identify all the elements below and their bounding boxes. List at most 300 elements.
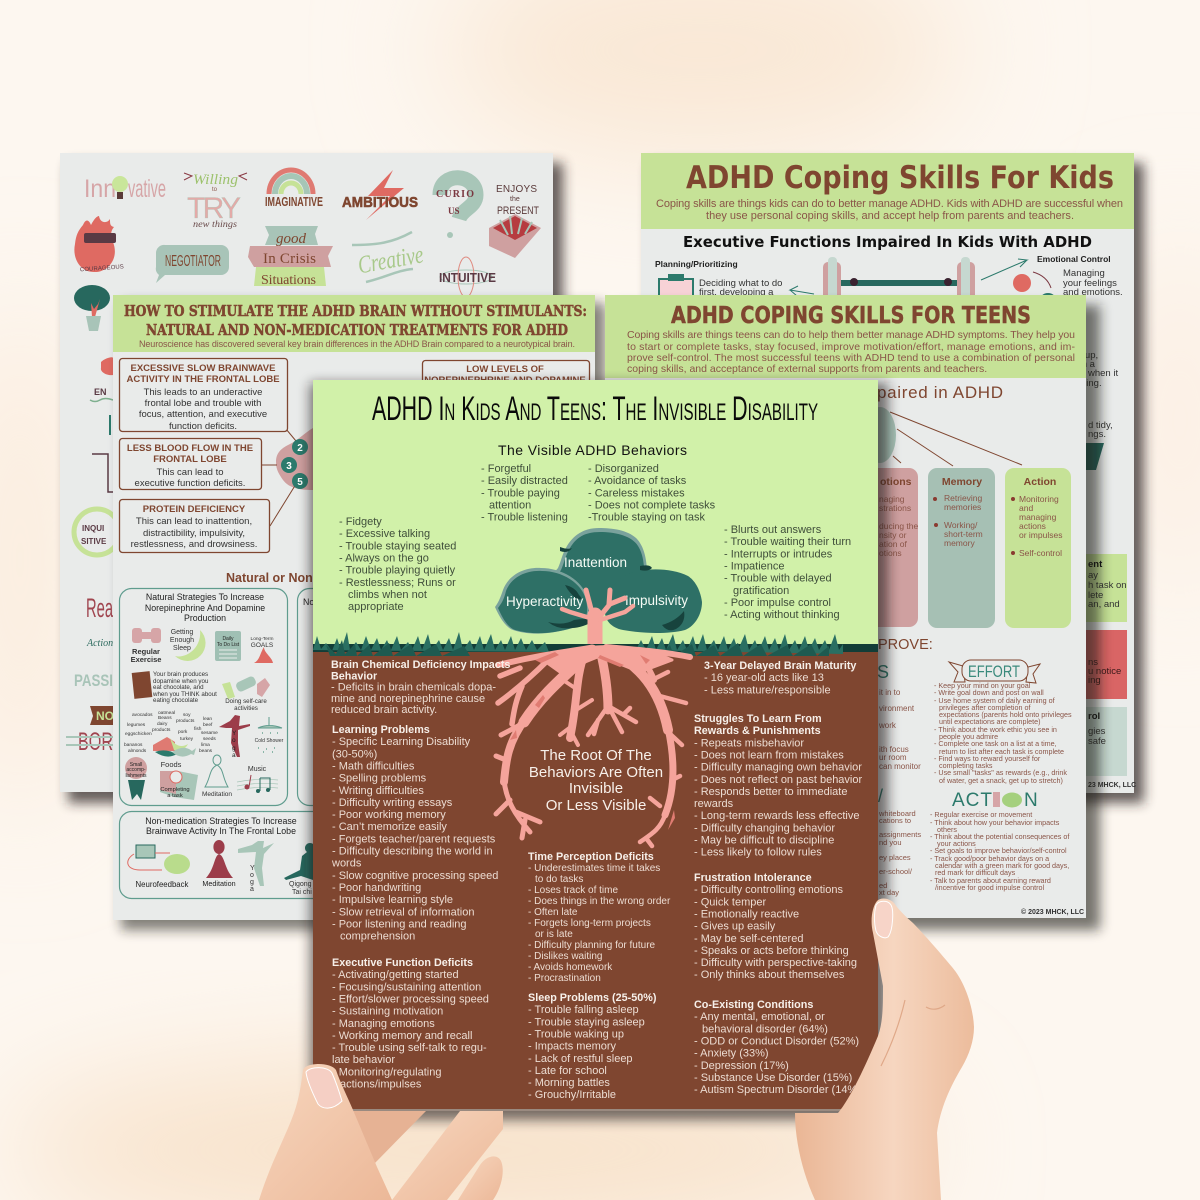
tree labels: Impulsivity xyxy=(625,593,688,608)
icon: qigong figure: Qigong xyxy=(289,881,312,888)
card: action xyxy=(1005,468,1071,628)
heading: impaired in ADHD: paired in ADHD xyxy=(877,383,1003,402)
block: time perception deficits: - Procrastination xyxy=(528,973,601,984)
hand: left holding poster xyxy=(259,1064,503,1200)
foods list: Beans xyxy=(158,715,172,721)
box: excessive slow brainwave: focus, attention, and executive xyxy=(139,409,267,420)
list: inattention right: - Does not complete tasks xyxy=(588,499,716,511)
list: action tips: - Think about the potential consequences of xyxy=(930,832,1069,841)
block: learning problems: - Can’t memorize easily xyxy=(332,821,447,833)
header band xyxy=(605,295,1086,378)
card: emotions: strations xyxy=(879,503,911,513)
block: time perception deficits: - Often late xyxy=(528,907,578,918)
block: learning problems: - Poor handwriting xyxy=(332,882,421,894)
box: pale teal xyxy=(1060,707,1127,776)
box: less blood flow: FRONTAL LOBE xyxy=(153,454,227,465)
sticker: willing to try: TRY xyxy=(187,192,241,225)
card: memory: Memory xyxy=(942,476,982,488)
sticker: willing to try: new things xyxy=(193,219,238,229)
icon: yoga: Y xyxy=(232,730,237,737)
block: learning problems: - Poor listening and reading xyxy=(332,918,467,930)
card: emotions: ducing the xyxy=(879,521,918,531)
sticker: ambitious lightning xyxy=(342,170,418,220)
card: action: managing xyxy=(1019,512,1057,522)
tree roots xyxy=(496,647,690,846)
box: less blood flow xyxy=(120,438,262,490)
list: effort tips: - Keep your mind on your goal xyxy=(934,681,1031,690)
list fragment: planning and organization: vironment xyxy=(879,704,915,713)
icon: meditation figure: Meditation xyxy=(202,879,236,888)
sticker: enjoys the present: PRESENT xyxy=(497,205,539,217)
list: inattention left: attention xyxy=(489,499,531,511)
sticker: entertaining fragment xyxy=(90,357,113,435)
hand: right holding poster xyxy=(795,899,974,1200)
list: effort tips: of water, get a snack, get up to stretch) xyxy=(939,776,1063,785)
list: inattention right: - Careless mistakes xyxy=(588,487,685,499)
sticker: innovative: Inn xyxy=(84,175,116,203)
list: impulsivity: - Impatience xyxy=(724,560,785,572)
block: executive function deficits: - Monitoring/regulating xyxy=(332,1066,441,1078)
header band: they use personal coping skills, and accept help from parents and teachers. xyxy=(706,210,1074,222)
block: time perception deficits: - Difficulty planning for future xyxy=(528,940,656,951)
icon: cold shower xyxy=(255,717,284,752)
icon: goals: GOALS xyxy=(251,642,274,649)
card: memory: Retrieving xyxy=(944,493,983,503)
list fragment: planning and organization: ur room xyxy=(879,753,907,762)
list: effort tips: until expectations are complete) xyxy=(939,717,1040,726)
block: learning problems: - Poor working memory xyxy=(332,809,446,821)
tree labels xyxy=(506,555,688,609)
banner: effort xyxy=(949,660,1040,683)
block: learning problems: (30-50%) xyxy=(332,748,377,760)
icon: neurofeedback xyxy=(128,845,190,889)
panel: back-left strengths poster xyxy=(60,153,563,803)
block: rewards and punishments: Struggles To Learn From xyxy=(694,713,822,725)
sticker: enjoys the present: ENJOYS xyxy=(496,184,537,195)
block: time perception deficits: or is late xyxy=(535,929,573,940)
numbered markers: 5 xyxy=(297,477,303,488)
foods list: legumes xyxy=(127,722,146,728)
list fragment: planning and organization: can monitor xyxy=(879,762,921,771)
box: green: h task on xyxy=(1088,580,1127,591)
block: time perception deficits: Time Perception Deficits xyxy=(528,851,654,863)
sticker: reading, action, passion, no boredom: Rea xyxy=(86,593,114,623)
block: rewards and punishments: Rewards & Punishments xyxy=(694,725,821,737)
sticker: negotiator speech bubble: NEGOTIATOR xyxy=(165,253,221,270)
sticker: imaginative rainbow: IMAGINATIVE xyxy=(265,194,323,209)
icon: small accomplishments ribbon: lishments xyxy=(125,773,147,779)
list: effort tips xyxy=(934,681,1072,785)
list fragment: planning and organization: nd you xyxy=(879,838,902,847)
block: co-existing conditions: - Autism Spectrum Disorder (14%) xyxy=(694,1084,861,1096)
block: brain chemical deficiency: reduced brain activity. xyxy=(331,704,437,716)
box: green: an, and xyxy=(1088,599,1120,610)
list fragment: planning and organization: S xyxy=(877,662,889,682)
block: rewards and punishments: - Repeats misbehavior xyxy=(694,737,804,749)
panel: natural strategies: Norepinephrine And Dopamine xyxy=(145,603,265,613)
block: rewards and punishments: - Less likely to follow rules xyxy=(694,847,822,859)
block: frustration intolerance: - Only thinks about themselves xyxy=(694,969,845,981)
sticker: reading, action, passion, no boredom: NO xyxy=(96,709,114,723)
box: protein deficiency: distractibility, impulsivity, xyxy=(143,528,245,539)
icon: dumbbell xyxy=(131,628,161,664)
block: time perception deficits: - Dislikes waiting xyxy=(528,951,602,962)
box: coral xyxy=(1060,630,1127,699)
list fragment: planning and organization: ey places xyxy=(879,853,911,862)
block: rewards and punishments: - May be difficult to discipline xyxy=(694,834,834,846)
icon: small accomplishments ribbon xyxy=(125,757,147,800)
item: emotional control: your feelings xyxy=(1063,278,1117,289)
sticker: curious question mark xyxy=(436,178,476,238)
icon: neurofeedback: Neurofeedback xyxy=(136,880,189,889)
numbered markers xyxy=(281,439,308,489)
copyright: © 2023 MHCK, LLC xyxy=(1021,908,1084,916)
icon: yoga: o xyxy=(232,737,236,744)
block: executive function deficits: - Working memory and recall xyxy=(332,1030,472,1042)
visible text fragments right edge xyxy=(1077,332,1118,470)
panel: non-medication strategies: Non-medication Strategies To Increase xyxy=(145,816,297,826)
sticker: innovative xyxy=(84,175,166,203)
list: effort tips: - Use home system of daily earning of xyxy=(934,696,1055,705)
list: effort tips: - Use small "tasks" as rewards (e.g., drink xyxy=(934,768,1067,777)
header band: prove self-control. The most successful teens with ADHD tend to use a combination of personal xyxy=(627,352,1075,364)
header band: Neuroscience has discovered several key brain differences in the ADHD Brain compared to a neurotypical brain. xyxy=(139,339,575,349)
foods list: bananos xyxy=(124,742,143,748)
header band: ADHD Coping Skills For Kids xyxy=(686,160,1114,196)
block: frustration intolerance: - Quick temper xyxy=(694,896,766,908)
icon: yoga figure: o xyxy=(250,872,254,879)
box: coral: u notice xyxy=(1088,666,1121,677)
box: green: lete xyxy=(1088,590,1103,601)
block: rewards and punishments: rewards xyxy=(694,798,734,810)
decorative bracket xyxy=(92,454,113,492)
box: low levels xyxy=(422,360,590,410)
block: frustration intolerance: - Speaks or acts before thinking xyxy=(694,945,849,957)
item: planning: Deciding what to do xyxy=(699,278,782,289)
block: brain chemical deficiency: Brain Chemical Deficiency Impacts xyxy=(331,659,510,671)
sticker: courageous xyxy=(74,216,124,273)
icon: small accomplishments ribbon: accomp- xyxy=(126,767,146,773)
heading: action xyxy=(952,790,1038,811)
block: learning problems: - Impulsive learning style xyxy=(332,894,453,906)
block: learning problems: - Spelling problems xyxy=(332,773,427,785)
icon: qigong figure xyxy=(284,843,315,896)
box: excessive slow brainwave: ACTIVITY IN THE FRONTAL LOBE xyxy=(126,374,280,385)
sticker: willing to try xyxy=(184,172,247,229)
list fragment: planning and organization: whiteboard xyxy=(878,809,916,818)
foods list: turkey xyxy=(180,736,194,742)
list: hyperactivity: - Trouble playing quietly xyxy=(339,565,456,577)
block: executive function deficits: late behavior xyxy=(332,1054,395,1066)
root shading xyxy=(510,652,675,830)
item: emotional control: Managing xyxy=(1063,268,1105,279)
block: learning problems: - Slow cognitive processing speed xyxy=(332,870,498,882)
block: sleep problems: - Trouble waking up xyxy=(528,1028,624,1040)
block: executive function deficits: actions/impulses xyxy=(340,1078,422,1090)
list fragment: planning and organization: er-school/ xyxy=(879,867,913,876)
box: protein deficiency: This can lead to inattention, xyxy=(136,516,252,527)
block: sleep problems: - Morning battles xyxy=(528,1077,610,1089)
list fragment: planning and organization: it in to xyxy=(879,688,901,697)
icon: completing a task xyxy=(160,771,198,800)
sticker: inquisitive xyxy=(74,509,120,555)
block: time perception deficits: - Forgets long-term projects xyxy=(528,918,651,929)
panel: front invisible disability poster xyxy=(310,380,888,1120)
list: action tips: - Track good/poor behavior days on a xyxy=(930,854,1049,863)
block: learning problems: - Difficulty describing the world in xyxy=(332,846,493,858)
block: executive function deficits: - Focusing/sustaining attention xyxy=(332,981,481,993)
header band: coping skills, and acceptance of external supports from parents and teachers. xyxy=(627,363,987,375)
heading: executive functions: Executive Functions Impaired In Kids With ADHD xyxy=(683,233,1092,251)
icon: moon: Getting xyxy=(171,629,193,636)
card: action: Action xyxy=(1024,476,1056,488)
box: excessive slow brainwave: This leads to an underactive xyxy=(144,387,262,398)
sticker: curious question mark: US xyxy=(448,206,460,216)
list: effort tips: people you admire xyxy=(939,732,998,741)
header band: HOW TO STIMULATE THE ADHD BRAIN WITHOUT STIMULANTS: xyxy=(124,302,587,320)
numbered markers: 2 xyxy=(297,443,303,454)
list: inattention left: - Trouble paying xyxy=(481,487,560,499)
block: frustration intolerance: - May be self-centered xyxy=(694,933,803,945)
list: effort tips: - Write goal down and post on wall xyxy=(934,688,1044,697)
card: emotions: otions xyxy=(880,476,912,488)
heading: action: N xyxy=(1024,790,1038,811)
header band: Coping skills are things teens can do to help them better manage ADHD symptoms. They help you xyxy=(627,329,1075,341)
icon: moon xyxy=(170,629,206,661)
box: low levels: LOW LEVELS OF xyxy=(466,364,544,375)
box: coral: ing xyxy=(1088,675,1101,686)
block: learning problems: - Specific Learning Disability xyxy=(332,736,471,748)
block: co-existing conditions: - Depression (17%) xyxy=(694,1060,789,1072)
block: time perception deficits: - Does things in the wrong order xyxy=(528,896,671,907)
list: inattention right: - Avoidance of tasks xyxy=(588,475,687,487)
sticker: good in crisis situations: In Crisis xyxy=(263,251,316,267)
foods list: lima xyxy=(201,742,210,748)
panel: mid-left how to stimulate poster xyxy=(113,295,605,930)
block: delayed brain maturity: - 16 year-old acts like 13 xyxy=(704,672,824,684)
list: effort tips: return to list after each task is complete xyxy=(939,747,1064,756)
panel: natural strategies xyxy=(120,588,288,806)
tree labels: Inattention xyxy=(564,555,627,570)
icon: to-do list: To Do List xyxy=(217,642,240,648)
item: emotional control: Emotional Control xyxy=(1037,254,1111,264)
list fragment: planning and organization: xt day xyxy=(879,888,899,897)
list: effort tips: privileges after completion of xyxy=(939,703,1030,712)
header band: NATURAL AND NON-MEDICATION TREATMENTS FOR ADHD xyxy=(146,321,568,339)
foods list: eggschicken xyxy=(125,731,152,737)
block: learning problems: - Writing difficulties xyxy=(332,785,424,797)
icon: completing a task: a task xyxy=(167,793,183,799)
block: sleep problems: - Impacts memory xyxy=(528,1041,617,1053)
dumbbell illustration xyxy=(823,257,975,302)
block: executive function deficits: - Managing emotions xyxy=(332,1018,435,1030)
icon: self-care: Doing self-care xyxy=(225,698,267,705)
caption: the root: Behaviors Are Often xyxy=(529,764,663,781)
box: low levels: NOREPINEPHRINE AND DOPAMINE xyxy=(424,375,586,386)
caption: the root xyxy=(529,747,663,814)
icon: meditation: Meditation xyxy=(202,791,232,798)
block: executive function deficits: - Sustaining motivation xyxy=(332,1006,443,1018)
list: hyperactivity: - Excessive talking xyxy=(339,528,430,540)
block: learning problems: comprehension xyxy=(340,931,415,943)
foods list: beans xyxy=(199,748,213,754)
block: sleep problems: - Late for school xyxy=(528,1065,607,1077)
list: hyperactivity: appropriate xyxy=(348,601,404,613)
visible text fragments right edge: e) xyxy=(1077,332,1085,343)
card: memory: short-term xyxy=(944,529,983,539)
block: sleep problems: - Lack of restful sleep xyxy=(528,1053,633,1065)
header band: Coping skills are things kids can do to better manage ADHD. Kids with ADHD are successful when xyxy=(656,198,1123,210)
icon: goals: Long-Term xyxy=(251,636,273,642)
block: learning problems: - Math difficulties xyxy=(332,760,415,772)
sticker: enjoys the present xyxy=(489,184,541,258)
panel: second strategies box xyxy=(298,588,466,806)
card: memory: Working/ xyxy=(944,520,978,530)
foods list: lean xyxy=(203,716,212,722)
foods list: pork xyxy=(178,729,188,735)
list: impulsivity: - Trouble waiting their turn xyxy=(724,536,851,548)
foods list: fish xyxy=(194,726,202,732)
card: memory: memory xyxy=(944,538,975,548)
heading: action: ACT xyxy=(952,790,992,811)
icon: music xyxy=(237,766,278,793)
box: protein deficiency xyxy=(120,500,270,552)
list: action tips: /incentive for good impulse control xyxy=(935,883,1044,892)
block: executive function deficits: - Activating/getting started xyxy=(332,969,459,981)
list: effort tips: expectations (parents hold onto privileges xyxy=(939,710,1072,719)
list: hyperactivity: climbs when not xyxy=(348,589,427,601)
list: action tips: - Regular exercise or movement xyxy=(930,810,1032,819)
sticker: negotiator speech bubble xyxy=(156,245,229,283)
foods list: soy xyxy=(183,713,191,718)
icon: self-care xyxy=(222,675,270,712)
icon: cold shower: Cold Shower xyxy=(255,738,284,744)
arrow: to planning xyxy=(790,286,814,296)
box: excessive slow brainwave: function deficits. xyxy=(169,421,237,432)
box: excessive slow brainwave: EXCESSIVE SLOW BRAINWAVE xyxy=(131,363,275,374)
icon: yoga: g xyxy=(232,745,236,752)
sticker: inquisitive: INQUI xyxy=(82,524,104,533)
list fragment: planning and organization: cations to xyxy=(879,816,911,825)
foods list: almonds xyxy=(128,748,147,754)
block: learning problems: - Difficulty writing essays xyxy=(332,797,453,809)
visible text fragments right edge: d tidy, xyxy=(1088,420,1113,431)
block: rewards and punishments: - Long-term rewards less effective xyxy=(694,810,859,822)
icon: chocolate: when you THINK about xyxy=(152,691,217,698)
panel: back-right coping skills for kids poster xyxy=(641,153,1144,803)
icon: yoga figure: g xyxy=(250,879,254,886)
icon: meditation xyxy=(202,755,232,798)
list: action tips: - Talk to parents about earning reward xyxy=(930,876,1051,885)
panel: mid-right coping skills for teens poster xyxy=(605,295,1100,930)
visible text fragments right edge: ngs. xyxy=(1088,429,1106,440)
sticker: creative: Creative xyxy=(356,241,426,279)
block: rewards and punishments: - Responds better to immediate xyxy=(694,786,847,798)
panel: non-medication strategies: Brainwave Activity In The Frontal Lobe xyxy=(146,826,296,836)
block: frustration intolerance: - Difficulty with perspective-taking xyxy=(694,957,857,969)
block: delayed brain maturity: - Less mature/responsible xyxy=(704,684,831,696)
item: emotional control xyxy=(1013,254,1123,311)
list: hyperactivity: - Fidgety xyxy=(339,516,382,528)
block: co-existing conditions: behavioral disorder (64%) xyxy=(702,1023,828,1035)
list: action tips: others xyxy=(937,825,957,834)
block: executive function deficits: - Trouble using self-talk to regu- xyxy=(332,1042,487,1054)
icon: chocolate xyxy=(132,671,217,704)
icon: yoga: a xyxy=(232,752,236,759)
card: action: and xyxy=(1019,503,1033,513)
block: time perception deficits: to do tasks xyxy=(535,874,583,885)
list: inattention left: - Forgetful xyxy=(481,463,531,475)
list: action tips: red mark for difficult days xyxy=(935,868,1016,877)
visible text fragments right edge: ging. xyxy=(1081,378,1102,389)
box: green: ay xyxy=(1088,570,1098,581)
list: impulsivity: - Blurts out answers xyxy=(724,524,822,536)
sticker: innovative: vative xyxy=(128,175,166,203)
block: brain chemical deficiency: Behavior xyxy=(331,670,378,682)
sticker: curious question mark: CURIO xyxy=(436,189,474,200)
foods list xyxy=(124,710,218,769)
block: rewards and punishments: - Does not reflect on past behavior xyxy=(694,774,862,786)
list fragment: planning and organization: assignments xyxy=(879,830,921,839)
icon: music: Music xyxy=(248,766,267,773)
sticker: entertaining fragment: EN xyxy=(94,387,107,397)
caption: the root: Invisible xyxy=(569,780,623,797)
icon: yoga figure: Y xyxy=(250,865,255,872)
icon: self-care: activities xyxy=(234,705,258,712)
block: co-existing conditions: - Substance Use Disorder (15%) xyxy=(694,1072,852,1084)
box: less blood flow: executive function deficits. xyxy=(135,478,245,489)
sticker: good in crisis situations: good xyxy=(276,231,306,247)
block: frustration intolerance: - Emotionally reactive xyxy=(694,908,799,920)
item: planning xyxy=(655,259,782,309)
icon: chocolate: eating chocolate xyxy=(153,697,199,704)
visible text fragments right edge: ith a xyxy=(1077,359,1096,370)
box: pale teal: safe xyxy=(1088,736,1106,747)
list: effort tips: - Think about the work ethic you see in xyxy=(934,725,1057,734)
sticker: intuitive: INTUITIVE xyxy=(439,270,496,285)
sticker: good in crisis situations xyxy=(248,226,333,288)
list: impulsivity: - Trouble with delayed xyxy=(724,573,832,585)
list: hyperactivity: - Trouble staying seated xyxy=(339,540,456,552)
block: rewards and punishments: - Does not learn from mistakes xyxy=(694,749,844,761)
icon: to-do list xyxy=(215,631,241,661)
list: action tips: calendar with a green mark for good days, xyxy=(935,861,1069,870)
foods list: dairy xyxy=(157,721,168,727)
list fragment: planning and organization xyxy=(877,662,921,897)
foods list: products xyxy=(176,718,195,724)
card: emotions: ation of xyxy=(879,539,908,549)
list: inattention right: - Disorganized xyxy=(588,463,659,475)
header band xyxy=(113,295,595,352)
block: learning problems: - Forgets teacher/parent requests xyxy=(332,833,496,845)
banner: effort: EFFORT xyxy=(968,662,1020,681)
list fragment: planning and organization: / xyxy=(878,786,883,806)
icon: goals xyxy=(251,636,274,663)
block: rewards and punishments: - Difficulty managing own behavior xyxy=(694,762,862,774)
icon: yoga xyxy=(219,715,250,759)
block: co-existing conditions: - Anxiety (33%) xyxy=(694,1048,769,1060)
heading: ways to improve: PROVE: xyxy=(878,637,933,653)
grass and soil line xyxy=(313,632,878,656)
sticker: reading, action, passion, no boredom: BOR xyxy=(78,728,113,756)
block: time perception deficits: - Underestimates time it takes xyxy=(528,863,660,874)
box: pale teal: gies xyxy=(1088,726,1106,737)
card: action: Self-control xyxy=(1019,548,1062,558)
panel: second strategies box: No xyxy=(303,597,314,607)
cloud with connector lines xyxy=(864,407,1022,466)
foods list: avocados xyxy=(132,712,153,718)
box: excessive slow brainwave: frontal lobe and trouble with xyxy=(145,398,261,409)
